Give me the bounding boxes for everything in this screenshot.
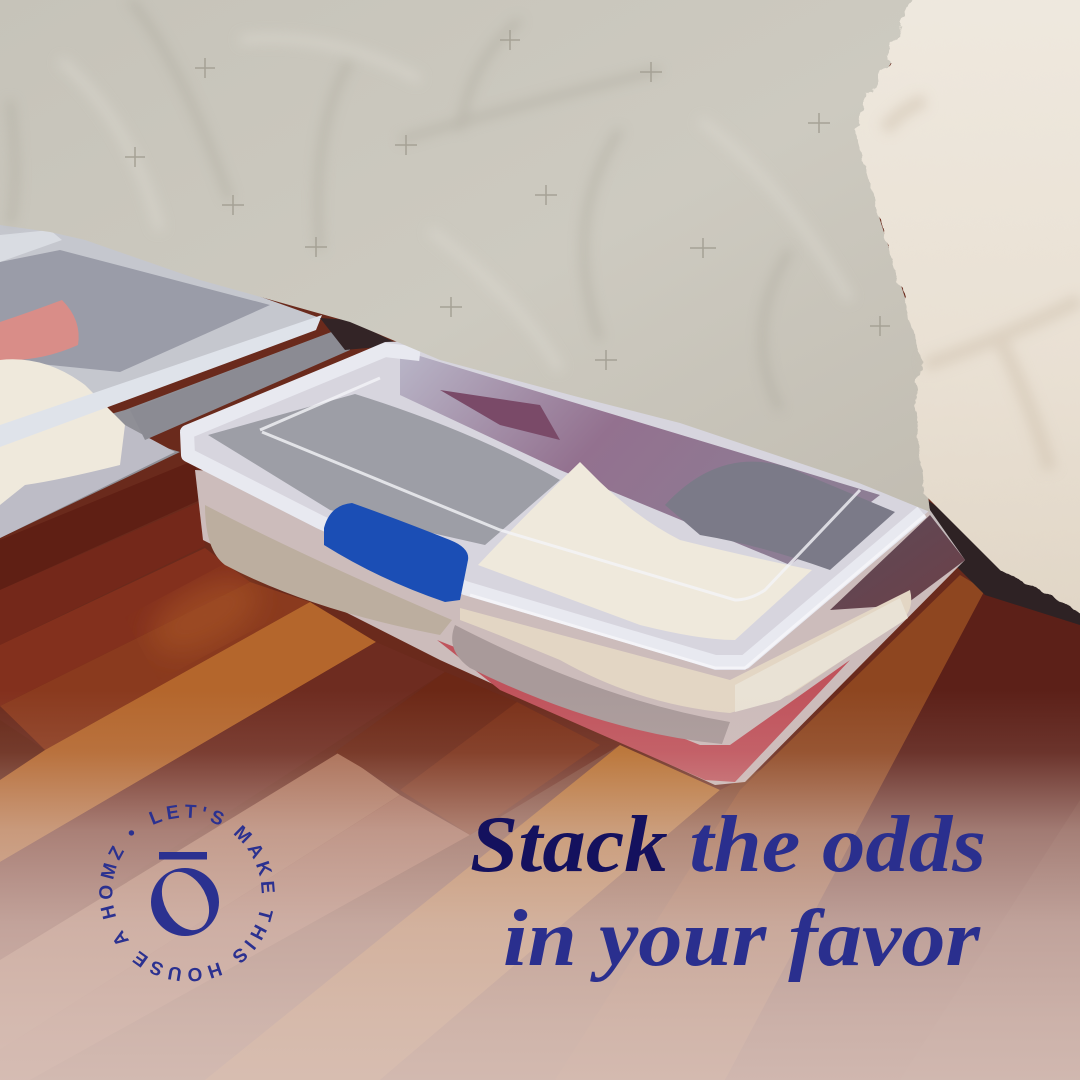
quilting stitches (125, 30, 890, 370)
heading (470, 801, 986, 983)
fluffy blanket (855, 0, 1080, 640)
main storage box (180, 340, 965, 785)
lid front edge (470, 515, 925, 668)
circular tagline: LET'S MAKE THIS HOUSE A HOMZ • (99, 804, 275, 982)
bottom fade overlay (0, 690, 1080, 1080)
box tub (195, 470, 965, 785)
lid rim (187, 350, 922, 662)
shadow beside box (920, 495, 1080, 625)
wooden floor (0, 440, 1080, 1080)
white sweater (478, 462, 812, 640)
folded clothes: red (437, 640, 850, 782)
lid inner line (260, 378, 860, 600)
heading line two: in your favor (503, 895, 981, 983)
purple garments (400, 350, 880, 565)
dark contents at right end (830, 515, 965, 610)
comforter highlights (60, 38, 850, 370)
grey sweater (208, 394, 560, 545)
lid (180, 340, 930, 670)
dark knit garment (665, 462, 895, 570)
logo bar (159, 852, 207, 860)
folded clothes: beige (205, 505, 452, 635)
comforter on bed (0, 0, 930, 512)
logo ring (151, 868, 219, 936)
comforter folds (10, 0, 790, 410)
folded clothes: cream (460, 590, 911, 713)
brand logo badge (99, 804, 275, 982)
folded clothes: grey pink (452, 625, 730, 744)
blue clasp (324, 503, 468, 602)
shadow beneath bed (320, 318, 400, 350)
blanket shading (885, 100, 1080, 470)
heading line one: Stack the odds (470, 801, 986, 889)
left storage box under bed (0, 225, 352, 538)
